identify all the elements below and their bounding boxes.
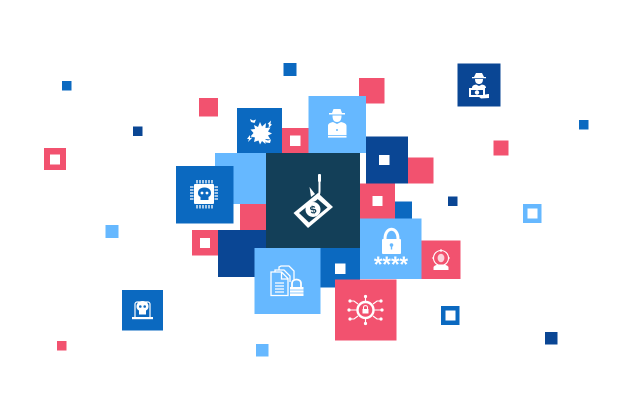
icon: burst: [247, 119, 272, 144]
icon: money on fishing hook: $: [309, 204, 318, 217]
panel: malware chip: [176, 166, 234, 224]
panel: hacker taking money: [458, 64, 500, 106]
icon: hub with lock: [349, 297, 382, 323]
panel: skull on laptop: [122, 290, 163, 330]
back-layer squares of the cluster: [192, 128, 434, 288]
icon: thief and cash hand: [469, 73, 489, 98]
scattered decorative squares: [44, 63, 588, 356]
icon: documents with padlock: [271, 266, 301, 296]
panel: explosion: [237, 108, 282, 153]
password asterisks: ****: [374, 252, 409, 277]
icon: padlock: [382, 229, 401, 254]
icon: chip with skull: [190, 180, 218, 208]
panel: target person: [422, 240, 460, 279]
panel: center phishing: [266, 153, 360, 248]
icon: crosshair on person: [432, 249, 450, 266]
panel: network lock: [335, 280, 396, 340]
panel: hacker with laptop: [308, 96, 366, 153]
icon: laptop with skull: [135, 302, 150, 317]
icon: hacker: [328, 109, 346, 138]
panel: password lock: [360, 218, 422, 279]
panel: locked documents: [254, 248, 320, 314]
